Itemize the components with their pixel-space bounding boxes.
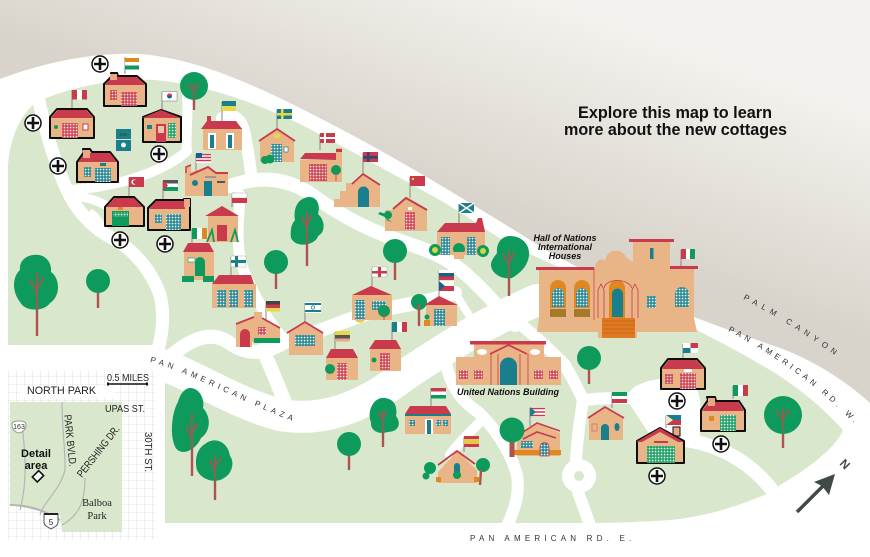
tree: plaza pair one [172,388,209,476]
street label: 30th St.: 30TH ST. [142,432,154,472]
house: Lithuania [325,331,358,380]
marker [25,115,41,131]
trees [14,72,802,500]
tree: plaza mid [337,432,361,470]
road label: Pan American Rd. W.: PAN AMERICAN RD. W. [728,326,854,422]
tree: central tall [291,197,324,266]
road label: Pan American Plaza: PAN AMERICAN PLAZA [150,356,292,421]
house: Israel [287,302,323,355]
icon: detail area diamond [32,471,44,482]
house: Mexico [701,385,748,431]
house: Czech Republic and Slovakia [411,270,458,326]
house: Norway [334,152,380,207]
tree: by Hall lawn [577,346,601,384]
house: Philippines [636,415,684,463]
marker [151,146,167,162]
marker [649,468,665,484]
map markers: plus icons [25,56,729,484]
Balboa Park area [10,402,122,532]
house: Ireland [182,228,214,282]
house: Turkey [105,177,144,226]
scale bar: 0.5 MILES [107,372,149,384]
street label: Upas St.: UPAS ST. [105,403,145,415]
house: Germany [236,301,280,347]
tree: plaza pair two [196,440,232,500]
icon: interstate 5 shield: 5 [49,518,54,527]
tree: by Hall of Nations [491,236,529,296]
icon: north arrow [797,456,853,512]
house: United States [185,153,228,196]
label: Hall of Nations International Houses: Hall of Nations [533,233,597,243]
tree: small left [86,269,110,308]
tree: top [180,72,208,110]
building: United Nations Building [456,341,561,385]
label: Hall of Nations International Houses: International [538,242,592,252]
tree: by Hungary [370,398,399,447]
label: Balboa Park: Balboa [82,498,112,509]
street label: Park Blvd.: PARK BVLD. [61,414,78,467]
house: Peru [50,90,94,138]
road label: Palm Canyon: PALM CANYON [744,294,838,355]
house: Ukraine [201,101,242,150]
marker [713,436,729,452]
house: Spain [422,436,490,485]
label: United Nations Building: United Nations Building [457,387,559,397]
icon: highway 163 shield [12,421,26,433]
footpaths [37,92,772,525]
marker [112,232,128,248]
house: Finland [212,256,256,308]
place label: North Park: NORTH PARK [27,385,97,397]
panel: park greenery and paths [8,80,843,525]
house: Poland [205,193,247,242]
title: explore prompt [564,103,787,139]
house: Denmark [300,133,342,182]
house: India [104,57,146,106]
title: explore prompt: Explore this map to learn [578,103,772,122]
building: Hall of Nations [536,239,698,338]
inset locator map [8,370,155,540]
icon: highway 163 shield: 163 [13,424,25,431]
marker [669,393,685,409]
house: Somaliland-style flag cottage [77,129,131,182]
house: Cuba [500,407,561,457]
label: Detail area: area [25,460,48,472]
house: Italy [369,322,407,371]
house: China [378,176,427,231]
house: Palestine [148,180,190,230]
title: explore prompt: more about the new cottages [564,120,787,139]
road label: Pan American Rd. E.: PAN AMERICAN RD. E. [470,534,635,543]
marker [92,56,108,72]
tree: small center [264,250,288,289]
house: England [352,267,392,323]
tree: right lawn [764,396,802,448]
house: South Korea [142,92,181,142]
marker [157,236,173,252]
icon: north arrow: N [837,456,853,472]
label: Balboa Park: Park [87,511,107,522]
house: Scotland [429,203,489,259]
tree: near Scotland [383,239,407,280]
house: Iran [588,392,627,440]
label: Detail area: Detail [21,448,51,460]
street label: Pershing Dr.: PERSHING DR. [75,424,123,480]
label: Hall of Nations International Houses: Houses [549,251,581,261]
marker [50,158,66,174]
house: Sweden [259,109,295,164]
house: Panama [661,343,705,389]
house: Hungary [405,388,451,434]
icon: interstate 5 shield [44,513,58,529]
green park lawns [8,80,843,523]
tree: left large [14,255,58,336]
